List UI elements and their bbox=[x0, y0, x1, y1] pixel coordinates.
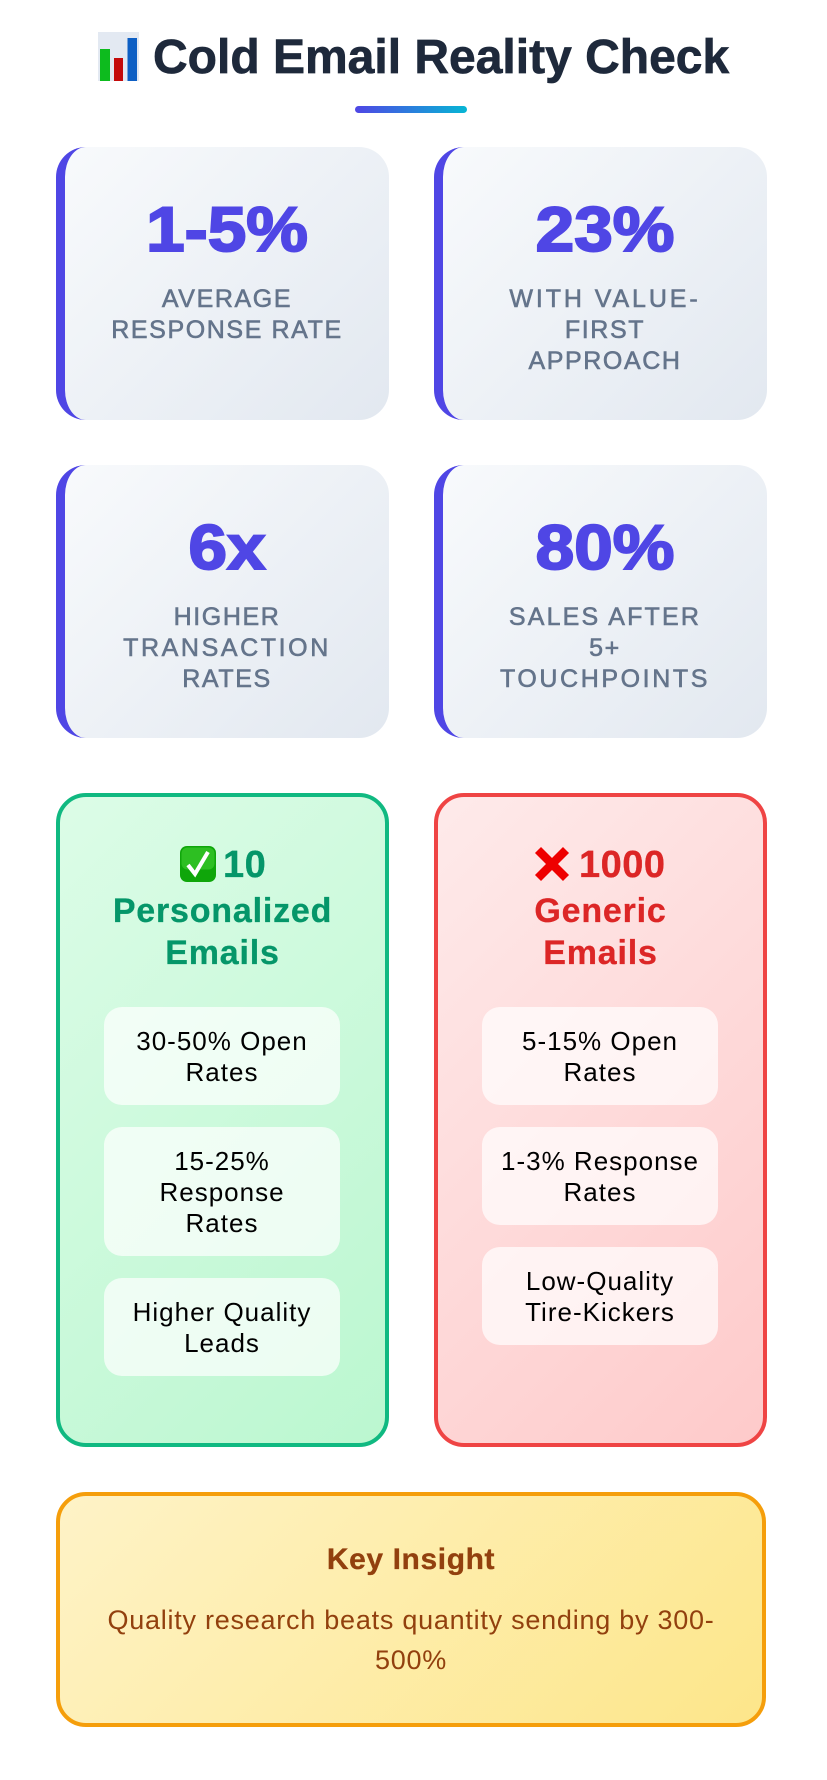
metric: lead quality: Tire-Kickers bbox=[525, 1297, 675, 1327]
stat card: value-first approach bbox=[434, 147, 767, 420]
metric: lead quality: Leads bbox=[184, 1328, 260, 1358]
stat label: AVERAGE bbox=[162, 285, 292, 313]
stat value: 1-5% bbox=[146, 195, 308, 265]
stat value: 80% bbox=[536, 513, 674, 583]
metric: open rates bbox=[104, 1007, 340, 1105]
stat label: FIRST bbox=[565, 316, 645, 344]
title underline bbox=[355, 106, 467, 113]
panel: personalized emails bbox=[56, 793, 389, 1447]
metric: response rates bbox=[104, 1127, 340, 1256]
panel: key insight bbox=[56, 1492, 766, 1727]
panel count: 1000 bbox=[579, 844, 666, 886]
metric: response rates: Response bbox=[159, 1177, 285, 1207]
metric: response rates: Rates bbox=[186, 1208, 258, 1238]
stat label: 5+ bbox=[589, 634, 621, 662]
stat label: TOUCHPOINTS bbox=[500, 665, 710, 693]
icon: bar chart bbox=[98, 32, 139, 81]
icon: cross mark bbox=[535, 847, 569, 881]
stat label bbox=[111, 285, 343, 344]
panel heading: Personalized bbox=[113, 892, 332, 930]
insight heading: Key Insight bbox=[327, 1543, 495, 1576]
panel count: 10 bbox=[223, 844, 266, 886]
metric: response rates: Rates bbox=[564, 1177, 636, 1207]
metric: lead quality bbox=[104, 1278, 340, 1376]
panel: generic emails bbox=[434, 793, 767, 1447]
panel heading bbox=[534, 892, 667, 972]
insight text bbox=[107, 1605, 715, 1675]
metric: open rates: Rates bbox=[564, 1057, 636, 1087]
stat value: 6x bbox=[188, 513, 266, 583]
stat label bbox=[500, 603, 710, 693]
stat label: APPROACH bbox=[528, 347, 682, 375]
metric: response rates: 15-25% bbox=[174, 1146, 270, 1176]
metric: response rates: 1-3% Response bbox=[501, 1146, 699, 1176]
heading text: Cold Email Reality Check bbox=[153, 31, 729, 84]
stat value: 23% bbox=[536, 195, 674, 265]
insight text: 500% bbox=[375, 1645, 447, 1675]
insight text: Quality research beats quantity sending by 300- bbox=[107, 1605, 715, 1635]
metric: response rates bbox=[482, 1127, 718, 1225]
title bbox=[98, 31, 730, 84]
panel heading: Emails bbox=[543, 934, 658, 972]
metric: open rates: 5-15% Open bbox=[522, 1026, 678, 1056]
stat label: RATES bbox=[182, 665, 272, 693]
stat label: WITH VALUE- bbox=[509, 285, 701, 313]
metric: lead quality: Low-Quality bbox=[526, 1266, 674, 1296]
stat card: touchpoints bbox=[434, 465, 767, 738]
metric: lead quality bbox=[482, 1247, 718, 1345]
metric: open rates bbox=[482, 1007, 718, 1105]
panel heading: Generic bbox=[534, 892, 667, 930]
stat label: TRANSACTION bbox=[123, 634, 331, 662]
icon: check mark bbox=[180, 846, 216, 882]
metric: lead quality: Higher Quality bbox=[133, 1297, 311, 1327]
panel heading bbox=[113, 892, 332, 972]
stat label: SALES AFTER bbox=[509, 603, 701, 631]
stat label: HIGHER bbox=[174, 603, 280, 631]
stat card: transaction rates bbox=[56, 465, 389, 738]
panel heading: Emails bbox=[165, 934, 280, 972]
metric: open rates: 30-50% Open bbox=[136, 1026, 308, 1056]
stat label bbox=[509, 285, 701, 375]
stat label: RESPONSE RATE bbox=[111, 316, 343, 344]
stat label bbox=[123, 603, 331, 693]
metric: open rates: Rates bbox=[186, 1057, 258, 1087]
stat card: average response rate bbox=[56, 147, 389, 420]
